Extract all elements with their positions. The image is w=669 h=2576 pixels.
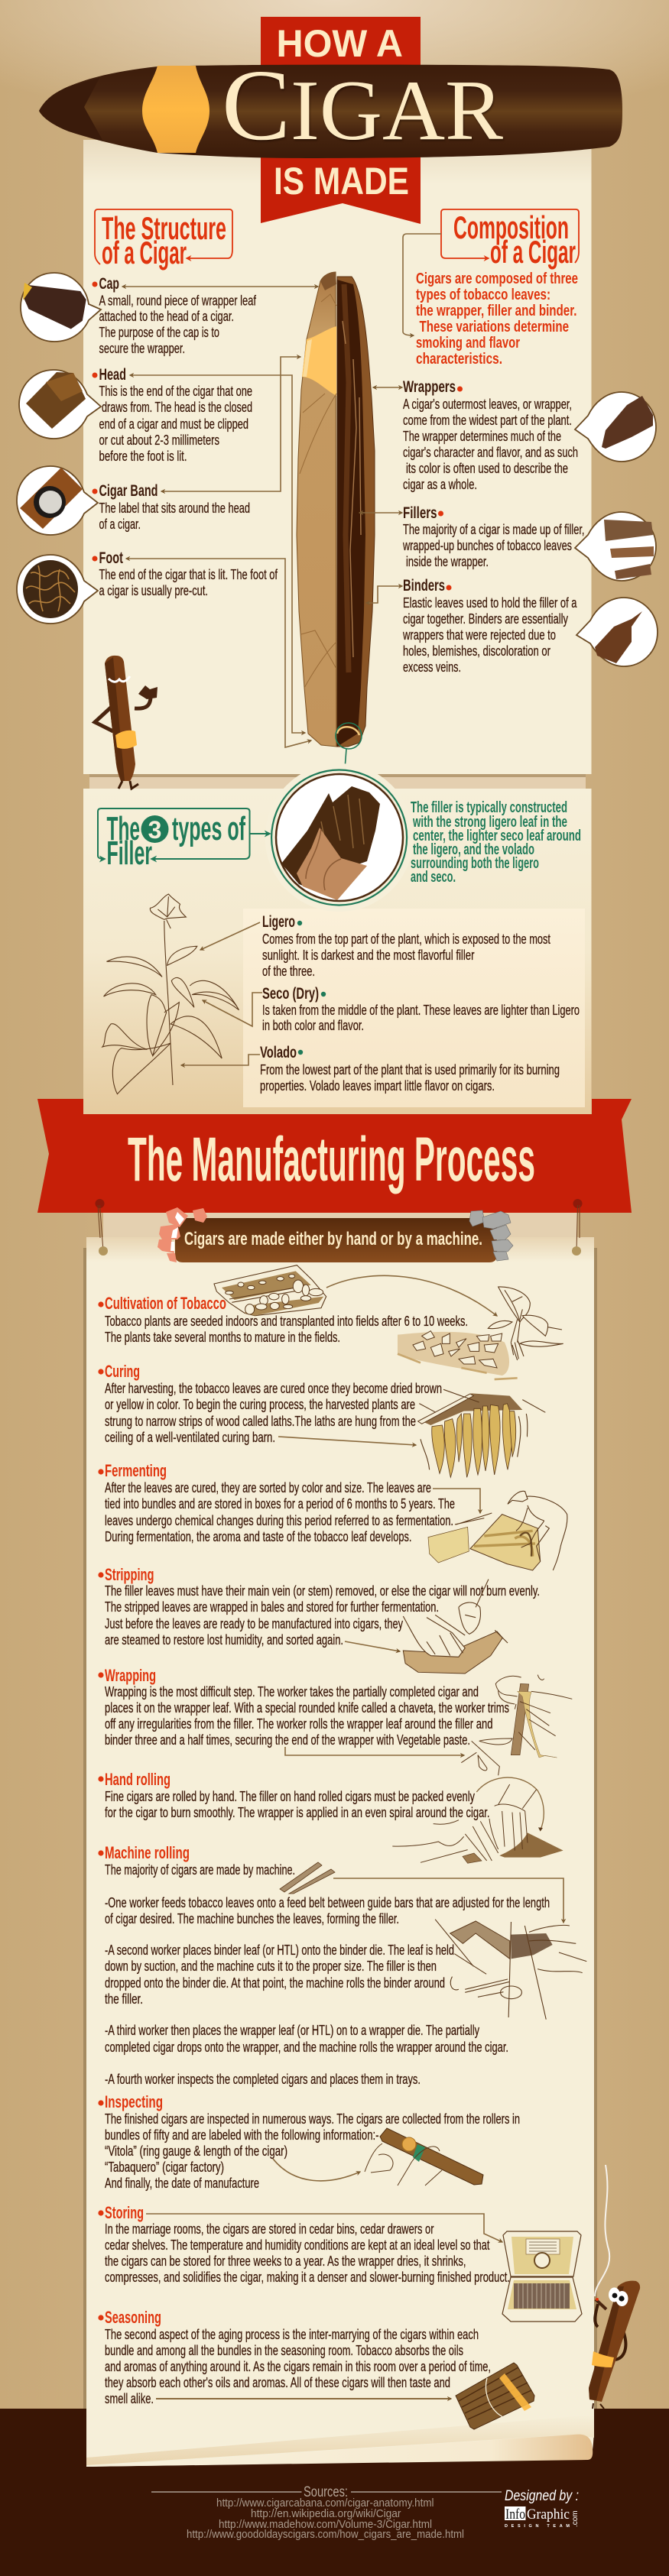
composition text: types of tobacco leaves: [416,287,550,303]
wrappers label arrow [373,387,402,388]
text block: head: or cut about 2-3 millimeters [99,432,219,448]
step: machine rolling: Machine rolling [105,1843,190,1862]
composition text: These variations determine [419,319,569,335]
text block: cigar band: of a cigar. [99,516,141,532]
step: storing: In the marriage rooms, the cigars are stored in cedar bins, cedar drawers or [105,2221,434,2237]
text block: wrappers: The wrapper determines much of the [403,428,561,444]
text block: wrappers: its color is often used to describe the [406,460,568,476]
photo bubble: filler [575,512,656,581]
step: machine rolling: the filler. [105,1991,143,2007]
step: wrapping [98,1666,509,1748]
text block: head [92,366,252,464]
designer credit [505,2488,580,2529]
text block: cap: secure the wrapper. [99,340,185,356]
step: machine rolling: down by suction, and the machine cuts it to the proper size. The filler is then [105,1958,437,1974]
text block: binders: cigar together. Binders are essentially [403,611,569,627]
designer credit: DESIGN TEAM [505,2524,570,2529]
text block: head: This is the end of the cigar that one [99,383,252,399]
step: stripping: Just before the leaves are ready to be manufactured into cigars, they [105,1615,404,1631]
step: seasoning: The second aspect of the aging process is the inter-marrying of the cigars within each [105,2326,479,2342]
step: fermenting: leaves undergo chemical changes during this period referred to as fermentation. [105,1512,453,1528]
arrow: storing [146,2214,502,2242]
step: curing: After harvesting, the tobacco leaves are cured once they become dried brown [105,1380,442,1396]
text block: wrappers: Wrappers [403,378,456,396]
text block: fillers: wrapped-up bunches of tobacco leaves [402,537,572,553]
panel: process scroll [86,1237,594,2467]
ligero arrow [200,922,260,950]
step: machine rolling: dropped onto the binder die. At that point, the machine rolls the binder around [105,1975,445,1991]
step: cultivation of tobacco: Tobacco plants are seeded indoors and transplanted into fields after 6 to 10 weeks. [105,1313,468,1329]
text block: volado: Volado [260,1044,297,1061]
text block: wrappers: A cigar's outermost leaves, or wrapper, [403,396,572,412]
text block: ligero: of the three. [262,963,315,979]
step: storing: compresses, and solidifies the cigar, making it a denser and slower-burning finished product. [105,2269,510,2285]
step: fermenting: tied into bundles and are stored in boxes for a period of 6 months to 5 years. The [105,1495,455,1512]
heading: composition of a cigar: of a Cigar [490,234,576,270]
step: curing: ceiling of a well-ventilated curing barn. [105,1429,275,1445]
text block: foot: The end of the cigar that is lit. The foot of [99,566,278,582]
photo bubble: foot [17,555,98,624]
photo bubble: binder [576,598,658,666]
step: seasoning: smell alike. [105,2390,154,2406]
step: curing [98,1362,442,1445]
text block: foot: Foot [99,549,123,567]
designer credit: .com [571,2510,580,2527]
text block: fillers [402,504,584,569]
step: machine rolling [98,1843,550,2087]
step: inspecting: bundles of fifty and are labeled with the following information:- [105,2127,379,2143]
arrow: fermenting [433,1489,480,1513]
step: storing [98,2203,510,2285]
text block: binders [402,577,577,675]
cap label arrow [122,286,318,287]
text block: cigar band [92,482,250,532]
composition text: characteristics. [416,351,502,368]
step: hand rolling [98,1770,489,1820]
heading: the 3 types of filler [98,808,249,872]
title: is made: IS MADE [274,160,409,203]
photo bubble: cap [18,273,101,342]
text block: wrappers: cigar's character and flavor, and as such [403,444,578,460]
head label arrow [130,375,305,733]
text block: fillers: The majority of a cigar is made up of filler, [403,521,584,537]
heading: structure of a cigar: The Structure [102,210,226,246]
green connector from cigar foot [345,749,346,769]
filler description: center, the lighter seco leaf around [413,828,581,844]
cigar anatomy diagram [297,272,375,749]
illustration: cigar bundle [456,2363,534,2429]
paper back edges [83,1248,597,2409]
composition text: Cigars are composed of three [416,271,578,287]
arrow: stripping [345,1641,400,1651]
text block: cap: A small, round piece of wrapper leaf [99,292,257,309]
panel divider strip [89,774,586,789]
filler description: surrounding both the ligero [411,855,539,872]
step: machine rolling: -A third worker then places the wrapper leaf (or HTL) on to a wrapper die. The partially [105,2022,480,2038]
step: seasoning: they absorb each other's oils and aromas. All of these cigars will then taste and [105,2374,450,2390]
step: storing: Storing [105,2203,144,2222]
text block: head: before the foot is lit. [99,448,187,464]
step: wrapping: off any irregularities from the filler. The worker rolls the wrapper leaf around the filler and [105,1716,492,1732]
text block: cap: Cap [99,275,119,293]
right hanging nail [572,1199,583,1256]
foot label arrow [126,559,311,747]
sources list: http://www.cigarcabana.com/cigar-anatomy.html [216,2497,434,2510]
step: curing: strung to narrow strips of wood called laths.The laths are hung from the [105,1413,416,1429]
step: storing: the cigars can be stored for three weeks to a year. As the wrapper dries, it shrinks, [105,2253,466,2269]
heading: structure of a cigar: of a Cigar [102,235,187,271]
text block: head: Head [99,366,126,384]
binders label arrow [366,586,402,603]
sources list: http://en.wikipedia.org/wiki/Cigar [251,2507,401,2520]
step: seasoning: and aromas of anything around it. As the cigars remain in this room over a period of time, [105,2358,491,2374]
text block: wrappers [403,378,578,492]
step: stripping: are steamed to restore lost humidity, and sorted again. [105,1631,343,1648]
icon: metal fingers on right of sign [469,1210,513,1261]
step: machine rolling: completed cigar drops onto the wrapper, and the machine rolls the wrapper around the cigar. [105,2039,508,2055]
tobacco plant illustration [102,894,239,1094]
text block: seco: in both color and flavor. [262,1017,364,1033]
illustration: young plant and field [398,1287,563,1379]
composition text [416,271,578,368]
illustration: seed tray [214,1265,326,1316]
filler description [411,799,581,886]
text block: wrappers: come from the widest part of the plant. [403,412,572,428]
text block: binders: wrappers that were rejected due to [402,627,556,643]
illustration: wrapping hands and knife [461,1675,572,1775]
step: fermenting: During fermentation, the aroma and taste of the tobacco leaf develops. [105,1528,411,1544]
step: stripping [98,1565,540,1648]
sources list: http://www.goodoldayscigars.com/how_cigars_are_made.html [187,2528,464,2541]
step: storing: cedar shelves. The temperature and humidity conditions are kept at an ideal level so that [105,2237,489,2253]
text block: ligero: Comes from the top part of the plant, which is exposed to the most [262,931,550,947]
text block: cap: The purpose of the cap is to [99,324,219,340]
illustration: hand rolling [392,1777,563,1863]
panel: filler types inner [243,909,585,1107]
text block: wrappers: cigar as a whole. [403,476,477,492]
illustration: curing barn leaves [418,1389,545,1477]
heading: the 3 types of filler: Filler [107,834,152,872]
step: cultivation of tobacco: The plants take several months to mature in the fields. [105,1329,340,1345]
step: seasoning: Seasoning [105,2308,161,2327]
text block: volado: properties. Volado leaves impart little flavor on cigars. [260,1077,495,1094]
text block: cigar band: Cigar Band [99,482,158,500]
panel: structure and composition [83,140,592,774]
arrow: machine rolling [333,1878,563,1923]
text block: ligero: sunlight. It is darkest and the most flavorful filler [262,947,474,963]
sources list: http://www.madehow.com/Volume-3/Cigar.html [219,2518,432,2531]
step: hand rolling: Hand rolling [105,1770,170,1789]
step: machine rolling: -A second worker places binder leaf (or HTL) onto the binder die. The leaf is held [105,1942,454,1958]
step: cultivation of tobacco [98,1294,468,1345]
text block: cap: attached to the head of a cigar. [99,308,234,324]
filler description: and seco. [411,869,456,886]
arrow: seasoning [156,2398,451,2399]
arrow: tray to field [326,1275,497,1316]
text block: cap [92,275,257,356]
panel: filler types [83,789,592,1114]
title cigar [39,48,622,161]
text block: seco: Seco (Dry) [262,985,319,1003]
illustration: rolling machine [435,1920,586,2020]
designer credit: Designed by : [505,2488,579,2504]
text block: fillers: inside the wrapper. [406,553,489,569]
strip behind sign [103,1213,577,1237]
heading: structure of a cigar [95,209,232,271]
step: cultivation of tobacco: Cultivation of Tobacco [105,1294,226,1313]
text block: binders: holes, blemishes, discoloration or [403,643,550,659]
step: inspecting: “Tabaquero” (cigar factory) [105,2159,224,2175]
photo bubble: head [19,370,101,439]
photo bubble: cigar band [17,466,98,535]
text block: binders: excess veins. [403,659,461,675]
filler description: the ligero, and the volado [413,841,534,858]
text block: binders: Elastic leaves used to hold the filler of a [403,595,577,611]
step: machine rolling: of cigar desired. The machine bunches the leaves, forming the filler. [105,1910,399,1926]
text block: ligero: Ligero [262,913,295,931]
text block: binders: Binders [403,577,445,595]
composition text: smoking and flavor [416,335,520,352]
title cigar: CIGAR [222,48,503,161]
sources heading: Sources: [304,2484,348,2500]
step: wrapping: places it on the wrapper leaf. With a special rounded knife called a chaveta, the worker trims [105,1700,509,1716]
step: stripping: Stripping [105,1565,154,1584]
heading: the 3 types of filler: The [107,810,140,847]
manufacturing banner [37,1099,632,1213]
left hanging nail [95,1199,108,1256]
step: inspecting: “Vitola” (ring gauge & length of the cigar) [105,2143,287,2159]
title ribbon [261,17,421,224]
step: seasoning [98,2308,491,2406]
filler description: The filler is typically constructed [411,799,567,816]
text block: ligero [262,913,550,979]
filler description: with the strong ligero leaf in the [412,814,567,831]
illustration: hand holding cigar [365,2128,483,2186]
text block: fillers: Fillers [403,504,437,522]
designer credit: Graphic [527,2506,570,2523]
step: wrapping: binder three and a half times, securing the end of the wrapper with Vegetable paste. [105,1732,470,1748]
text block: cigar band: The label that sits around the head [99,500,250,516]
sources list [187,2497,464,2541]
heading: the 3 types of filler: types of [172,810,245,847]
sign: made by hand or machine [175,1218,497,1262]
step: hand rolling: Fine cigars are rolled by hand. The filler on hand rolled cigars must be packed evenly [105,1788,476,1804]
arrow: wrapping [285,1747,464,1755]
cigar mascot with moustache [95,656,158,789]
volado arrow [181,1055,260,1065]
illustration: stripping hands [403,1580,508,1674]
cigar band label arrow [161,357,300,491]
illustration: humidor [502,2231,582,2322]
smoke [595,2165,609,2296]
heading: the 3 types of filler: 3 [148,816,161,844]
step: inspecting: And finally, the date of manufacture [105,2175,259,2191]
icon: two cigars [280,1862,335,1894]
composition connector arrow [403,234,441,335]
seco arrow [203,993,262,1026]
filler photo circle [265,763,414,912]
photo bubble: wrapper [575,392,656,462]
cigar mascot smoking [589,2281,640,2409]
arrow to filler photo [250,833,270,834]
text block: foot: a cigar is usually pre-cut. [99,582,208,598]
fillers label arrow [359,512,402,514]
text block: head: draws from. The head is the closed [102,399,252,415]
text block: foot [92,549,278,598]
arrow: inspecting [273,2159,360,2181]
sign text: Cigars are made either by hand or by a machine. [184,1229,482,1249]
arrow: curing [278,1437,416,1445]
step: wrapping: Wrapping is the most difficult step. The worker takes the partially completed cigar and [105,1683,479,1700]
text block: head: end of a cigar and must be clipped [99,416,248,432]
composition text: the wrapper, filler and binder. [416,303,576,319]
title: how a: HOW A [277,22,403,65]
step: curing: or yellow in color. To begin the curing process, the harvested plants are [105,1396,415,1412]
heading: composition of a cigar [441,209,579,270]
step: wrapping: Wrapping [105,1666,156,1685]
text block: seco [262,985,580,1033]
step: fermenting [98,1461,455,1544]
step: inspecting: Inspecting [105,2092,163,2111]
step: fermenting: Fermenting [105,1461,167,1480]
step: stripping: The stripped leaves are wrapped in bales and stored for further fermentation. [105,1599,439,1615]
icon: fingers on left of sign [158,1207,207,1262]
heading: composition of a cigar: Composition [453,209,569,245]
step: seasoning: bundle and among all the bundles in the seasoning room. Tobacco absorbs the oils [105,2342,463,2358]
step: fermenting: After the leaves are cured, they are sorted by color and size. The leaves are [105,1479,431,1495]
step: inspecting [98,2092,520,2191]
step: machine rolling: -A fourth worker inspects the completed cigars and places them in trays. [105,2071,421,2087]
step: curing: Curing [105,1362,140,1381]
text block: volado [260,1044,560,1094]
designer credit: Info [505,2506,525,2523]
step: machine rolling: The majority of cigars are made by machine. [105,1862,295,1878]
step: hand rolling: for the cigar to burn smoothly. The wrapper is applied in an even spiral around the cigar. [105,1804,489,1820]
illustration: fermenting worker [428,1491,567,1570]
